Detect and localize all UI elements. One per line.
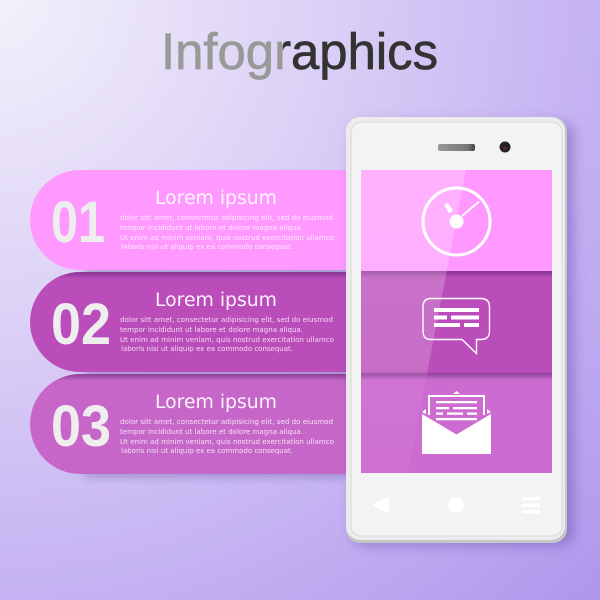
icon: envelope <box>422 391 491 454</box>
number 02: 02 <box>51 292 111 357</box>
text block 01: laboris nisi ut aliquip ex ea commodo consequat. <box>121 242 293 251</box>
band shadow <box>84 176 350 478</box>
icon: back button <box>374 498 388 512</box>
phone <box>346 117 574 546</box>
text block 03 <box>120 417 335 455</box>
number 03: 03 <box>51 394 111 459</box>
text block 02: Ut enim ad minim veniam, quis nostrud exercitation ullamco <box>120 335 335 344</box>
speaker <box>438 144 475 151</box>
icon: home button <box>448 497 464 513</box>
glare <box>361 170 466 473</box>
panel: band 01 <box>30 170 350 270</box>
heading 01: Lorem ipsum <box>155 188 277 209</box>
icon: speech bubble <box>423 298 490 354</box>
icon: clock <box>423 188 490 255</box>
text block 02: dolor sitt amet, consectetur adipisicing elit, sed do eiusmod <box>120 315 333 324</box>
panel: band 02 <box>30 272 350 372</box>
icon: menu button <box>522 497 540 514</box>
text block 02: laboris nisi ut aliquip ex ea commodo consequat. <box>121 344 293 353</box>
screen panel 2 <box>361 271 552 373</box>
text block 01 <box>120 213 335 251</box>
screen panel 1 <box>361 170 552 271</box>
number 01: 01 <box>51 190 105 255</box>
text block 03: tempor incididunt ut labore et dolore magna aliqua. <box>120 427 303 436</box>
heading 02: Lorem ipsum <box>155 290 277 311</box>
text block 02 <box>120 315 335 353</box>
text block 03: Ut enim ad minim veniam, quis nostrud exercitation ullamco <box>120 437 335 446</box>
heading 03: Lorem ipsum <box>155 392 277 413</box>
text block 01: Ut enim ad minim veniam, quis nostrud exercitation ullamco <box>120 233 335 242</box>
panel: band 03 <box>30 374 350 474</box>
text block 01: tempor incididunt ut labore et dolore magna aliqua. <box>120 223 303 232</box>
title: Infographics <box>161 23 438 80</box>
screen panel 3 <box>361 373 552 473</box>
text block 03: laboris nisi ut aliquip ex ea commodo consequat. <box>121 446 293 455</box>
camera <box>500 142 510 152</box>
text block 02: tempor incididunt ut labore et dolore magna aliqua. <box>120 325 303 334</box>
text block 03: dolor sitt amet, consectetur adipisicing elit, sed do eiusmod <box>120 417 333 426</box>
text block 01: dolor sitt amet, consectetur adipisicing elit, sed do eiusmod <box>120 213 333 222</box>
